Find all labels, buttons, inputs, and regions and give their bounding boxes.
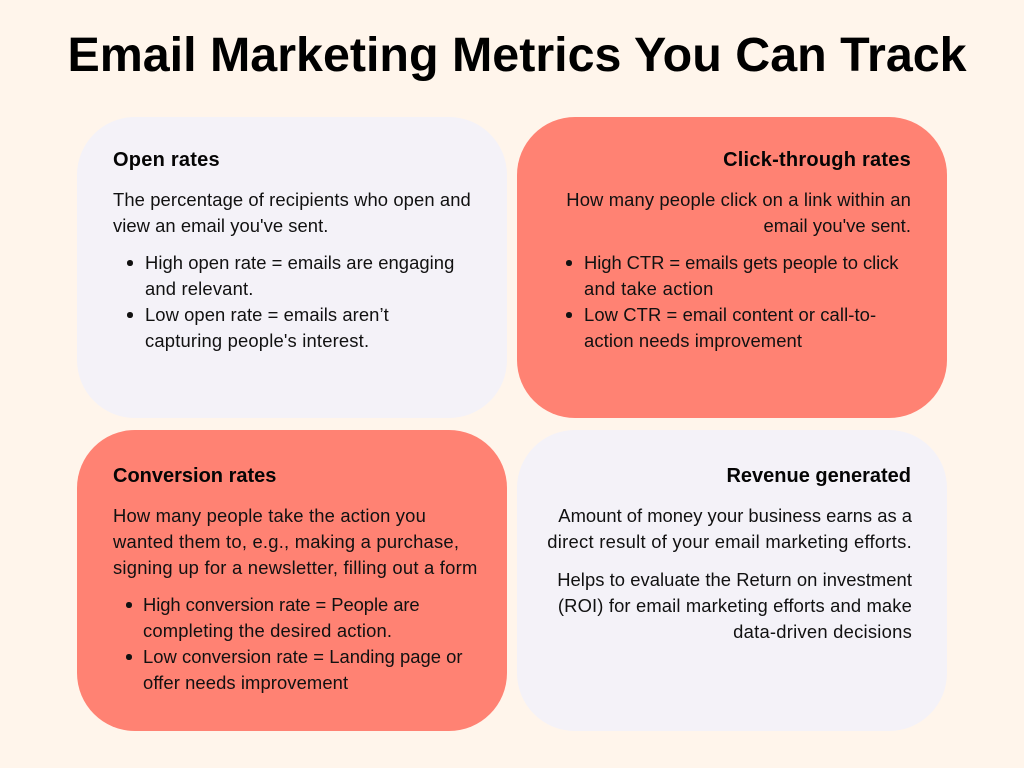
text: revenue ROI note: Helps to evaluate the Return on investment [557,569,912,590]
panel: conversion rates [77,430,507,731]
text: click-through description: How many people click on a link within an [566,189,911,210]
list: open rates bullets: capturing people's interest. [145,330,369,351]
text: revenue ROI note: (ROI) for email marketing efforts and make [558,595,912,616]
list: open rates bullets: Low open rate = emails aren’t [145,304,389,325]
text: open rates description: The percentage of recipients who open and [113,189,471,210]
panel: revenue generated [517,430,947,731]
heading: open rates: Open rates [113,149,220,171]
panel: click-through rates [517,117,947,418]
panel: open rates [77,117,507,418]
list: open rates bullets [127,252,454,351]
heading: conversion rates: Conversion rates [113,465,276,487]
list: click-through bullets: action needs improvement [584,330,802,351]
text: conversion description: wanted them to, e.g., making a purchase, [113,531,459,552]
list: open rates bullets: and relevant. [145,278,254,299]
text: conversion description: How many people take the action you [113,505,426,526]
text: revenue ROI note: data-driven decisions [733,621,912,642]
text: revenue description [547,505,912,552]
text: conversion description: signing up for a newsletter, filling out a form [113,557,478,578]
list: click-through bullets: and take action [584,278,714,299]
list: open rates bullets: High open rate = emails are engaging [145,252,454,273]
text: open rates description [113,189,471,236]
text: open rates description: view an email you've sent. [113,215,328,236]
text: conversion description [113,505,478,578]
title: Email Marketing Metrics You Can Track [67,28,967,82]
list: conversion bullets: Low conversion rate = Landing page or [143,646,463,667]
list: click-through bullets: High CTR = emails gets people to click [584,252,898,273]
list: conversion bullets: High conversion rate = People are [143,594,420,615]
text: click-through description: email you've sent. [763,215,911,236]
text: revenue description: direct result of your email marketing efforts. [547,531,912,552]
list: conversion bullets: completing the desired action. [143,620,392,641]
heading: click-through rates: Click-through rates [723,149,911,171]
list: click-through bullets: Low CTR = email content or call-to- [584,304,876,325]
list: conversion bullets: offer needs improvement [143,672,348,693]
text: revenue description: Amount of money your business earns as a [558,505,912,526]
text: click-through description [566,189,911,236]
heading: revenue generated: Revenue generated [726,465,911,487]
text: revenue ROI note [557,569,912,642]
list: conversion bullets [126,594,463,693]
list: click-through bullets [566,252,898,351]
